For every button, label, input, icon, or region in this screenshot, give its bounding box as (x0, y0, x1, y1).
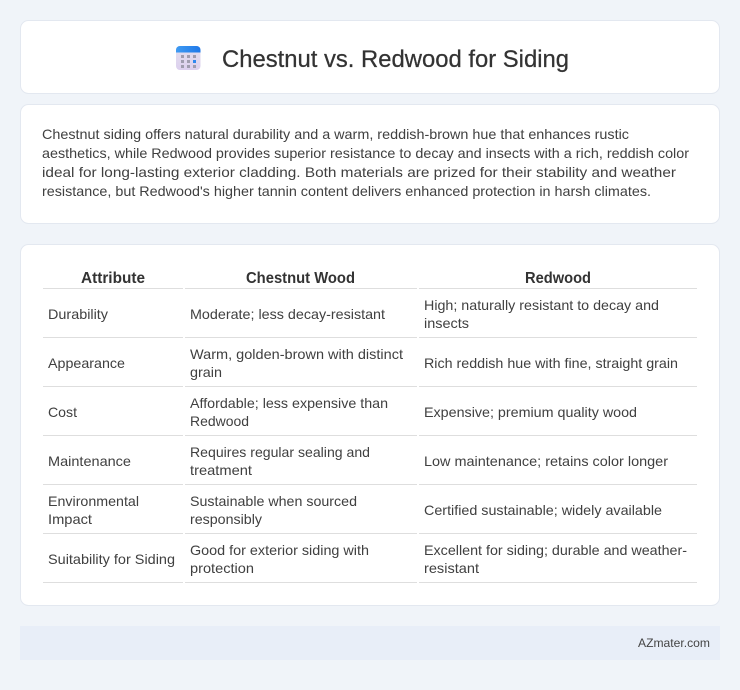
table header row (43, 270, 697, 289)
table row: appearance: grain (190, 364, 222, 380)
text block: introduction paragraph (42, 126, 689, 199)
text block: introduction paragraph: ideal for long-lasting exterior cladding. Both materials are prized for their stability and weather (42, 164, 676, 180)
footer text: source: AZmater.com (638, 636, 710, 650)
table row: maintenance: treatment (190, 462, 252, 478)
text block: introduction paragraph: Chestnut siding offers natural durability and a warm, reddish-brown hue that enhances rustic (42, 126, 629, 142)
table row: cost: Affordable; less expensive than (190, 395, 388, 411)
footer bar (20, 626, 720, 660)
table row: environmental impact: Impact (48, 511, 92, 527)
table row: suitability for siding: Suitability for Siding (48, 551, 175, 567)
table row: maintenance: Requires regular sealing and (190, 444, 370, 460)
table row: durability: insects (424, 315, 469, 331)
text block: introduction paragraph: resistance, but Redwood's higher tannin content delivers enhanced protection in harsh climates. (42, 183, 651, 199)
table row: maintenance: Low maintenance; retains color longer (424, 453, 668, 469)
panel: introduction (20, 104, 720, 224)
table row: maintenance (43, 444, 697, 485)
table header row: Attribute (81, 270, 145, 287)
table row: appearance: Appearance (48, 355, 125, 371)
table row: durability: Moderate; less decay-resistant (190, 306, 385, 322)
table row: cost: Redwood (190, 413, 249, 429)
table row: environmental impact (43, 493, 697, 534)
table row: cost: Cost (48, 404, 77, 420)
table row: durability (43, 297, 697, 338)
table row: durability: High; naturally resistant to decay and (424, 297, 659, 313)
table row: cost (43, 395, 697, 436)
panel: title card (20, 20, 720, 94)
table row: suitability for siding: Good for exterior siding with (190, 542, 369, 558)
table row: suitability for siding: resistant (424, 560, 479, 576)
table header row: Chestnut Wood (246, 270, 355, 287)
table row: environmental impact: Environmental (48, 493, 139, 509)
table row: suitability for siding: protection (190, 560, 254, 576)
table row: cost: Expensive; premium quality wood (424, 404, 637, 420)
table row: maintenance: Maintenance (48, 453, 131, 469)
table row: environmental impact: Certified sustainable; widely available (424, 502, 662, 518)
panel: comparison table (20, 244, 720, 606)
table row: suitability for siding: Excellent for siding; durable and weather- (424, 542, 687, 558)
text block: introduction paragraph: aesthetics, while Redwood provides superior resistance to decay and insects with a rich, reddish color (42, 145, 689, 161)
table row: appearance (43, 346, 697, 387)
table row: appearance: Warm, golden-brown with distinct (190, 346, 403, 362)
table row: environmental impact: Sustainable when sourced (190, 493, 357, 509)
table row: appearance: Rich reddish hue with fine, straight grain (424, 355, 678, 371)
table row: suitability for siding (43, 542, 697, 583)
table row: durability: Durability (48, 306, 108, 322)
title: Chestnut vs. Redwood for Siding (222, 46, 569, 73)
table row: environmental impact: responsibly (190, 511, 262, 527)
icon: calendar (176, 46, 200, 70)
table header row: Redwood (525, 270, 591, 287)
